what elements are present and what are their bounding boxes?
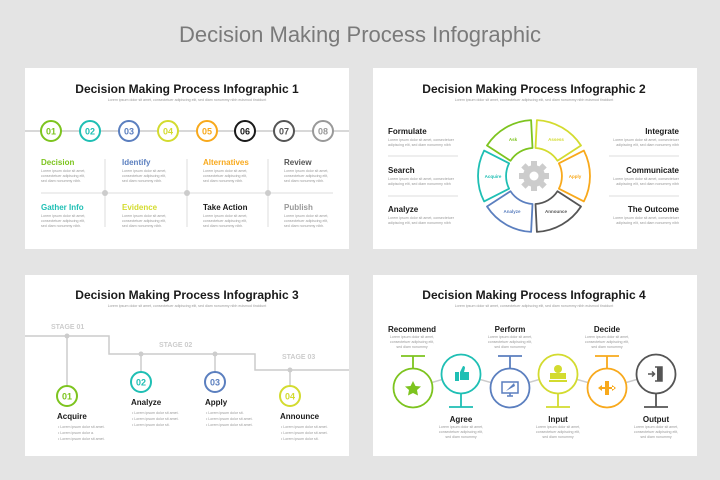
step labels: Input	[548, 415, 568, 424]
panel: infographic 1	[25, 68, 349, 249]
step labels: Decision	[41, 158, 74, 167]
panel: infographic 1: consectetuer adipiscing elit,	[203, 219, 247, 223]
step labels: Output	[643, 415, 669, 424]
panel: infographic 2: adipiscing elit, sed diam nonummy nibh	[388, 182, 451, 186]
panel: infographic 3: STAGE 03	[282, 354, 315, 361]
panel: infographic 2: Apply	[569, 174, 582, 179]
panel: infographic 3: • Lorem ipsum dolor a.	[58, 431, 94, 435]
panel: infographic 2: adipiscing elit, sed diam nonummy nibh	[388, 221, 451, 225]
panel: infographic 1: Lorem ipsum dolor sit amet,	[203, 214, 247, 218]
panel: infographic 1: sed diam nonummy nibh.	[284, 224, 324, 228]
T connectors	[401, 356, 668, 407]
panel: infographic 1: consectetuer adipiscing elit,	[122, 219, 166, 223]
panel: infographic 3: • Lorem ipsum dolor sit amet.	[206, 417, 253, 421]
panel: infographic 4: sed diam nonummy	[591, 345, 623, 349]
panel: infographic 3: Apply	[205, 398, 228, 407]
panel: infographic 3: Acquire	[57, 412, 87, 421]
panel: infographic 1: Lorem ipsum dolor sit amet,	[41, 169, 85, 173]
panel: infographic 4: sed diam nonummy	[542, 435, 574, 439]
left labels: Formulate	[388, 127, 427, 136]
panel: infographic 2: The Outcome	[628, 205, 680, 214]
panel: infographic 3: • Lorem ipsum dolor sit amet.	[132, 417, 179, 421]
panel: infographic 4: Lorem ipsum dolor sit amet,	[488, 335, 532, 339]
panel: infographic 4: consectetuer adipiscing elit,	[390, 340, 434, 344]
panel: infographic 1: 03	[124, 126, 134, 136]
heading 4: Decision Making Process Infographic 4	[422, 288, 646, 302]
panel: infographic 1: sed diam nonummy nibh.	[284, 179, 324, 183]
left labels: Search	[388, 166, 415, 175]
step labels: Recommend	[388, 325, 436, 334]
step labels: Evidence	[122, 203, 158, 212]
panel: infographic 2	[373, 68, 697, 249]
panel: infographic 2: Acquire	[485, 174, 502, 179]
panel: infographic 1: Lorem ipsum dolor sit amet,	[41, 214, 85, 218]
panel: infographic 4: Lorem ipsum dolor sit amet,	[536, 425, 580, 429]
panel: infographic 2: Lorem ipsum dolor sit amet, consectetuer	[613, 216, 680, 220]
icon: gear	[519, 161, 549, 191]
panel: infographic 2: Communicate	[626, 166, 680, 175]
panel: infographic 1: Lorem ipsum dolor sit amet,	[122, 214, 166, 218]
heading 1: Decision Making Process Infographic 1	[75, 82, 299, 96]
icon circles	[394, 354, 676, 408]
panel: infographic 1: 05	[202, 126, 212, 136]
panel: infographic 4: sed diam nonummy	[396, 345, 428, 349]
heading 2: Decision Making Process Infographic 2	[422, 82, 646, 96]
panel: infographic 1: consectetuer adipiscing elit,	[41, 219, 85, 223]
left labels: Analyze	[388, 205, 419, 214]
step labels: Gather Info	[41, 203, 84, 212]
panel: infographic 2: Lorem ipsum dolor sit amet, consectetuer	[388, 177, 455, 181]
panel: infographic 3: • Lorem ipsum dolor sit amet.	[206, 423, 253, 427]
heading 3: Decision Making Process Infographic 3	[75, 288, 299, 302]
panel: infographic 3: • Lorem ipsum dolor sit amet.	[58, 425, 105, 429]
panel: infographic 3: 02	[136, 378, 146, 388]
panel: infographic 4: consectetuer adipiscing elit,	[439, 430, 483, 434]
panel: infographic 4: Lorem ipsum dolor sit amet,	[634, 425, 678, 429]
panel: infographic 1: 08	[318, 126, 328, 136]
stage line	[25, 336, 349, 370]
panel: infographic 3: 04	[285, 392, 295, 402]
panel: infographic 3: Announce	[280, 412, 320, 421]
panel: infographic 3: 03	[210, 378, 220, 388]
panel: infographic 2: adipiscing elit, sed diam nonummy nibh	[616, 182, 679, 186]
icons	[405, 365, 662, 396]
panel: infographic 2: Assess	[548, 137, 564, 142]
panel: infographic 2: Lorem ipsum dolor sit amet, consectetuer	[613, 138, 680, 142]
panel: infographic 4: sed diam nonummy	[445, 435, 477, 439]
panel: infographic 2: Analyze	[503, 209, 521, 214]
step labels: Review	[284, 158, 312, 167]
panel: infographic 3: Analyze	[131, 398, 162, 407]
panel: infographic 1: Lorem ipsum dolor sit amet,	[203, 169, 247, 173]
step labels: Take Action	[203, 203, 248, 212]
panel: infographic 3: STAGE 01	[51, 324, 84, 331]
step labels	[41, 158, 313, 212]
panel: infographic 4: consectetuer adipiscing elit,	[634, 430, 678, 434]
panel: infographic 2: Announce	[545, 209, 567, 214]
panel: infographic 2: adipiscing elit, sed diam nonummy nibh	[616, 221, 679, 225]
panel: infographic 2: Lorem ipsum dolor sit amet, consectetuer adipiscing elit, sed diam nonummy nibh euismod tincidunt	[455, 98, 613, 102]
step labels	[388, 325, 669, 424]
panel: infographic 1: sed diam nonummy nibh.	[203, 179, 243, 183]
panel: infographic 1: Lorem ipsum dolor sit amet,	[284, 169, 328, 173]
panel: infographic 4: consectetuer adipiscing elit,	[585, 340, 629, 344]
panel: infographic 4: consectetuer adipiscing elit,	[536, 430, 580, 434]
step labels: Alternatives	[203, 158, 249, 167]
panel: infographic 2: Lorem ipsum dolor sit amet, consectetuer	[613, 177, 680, 181]
panel: infographic 1: 02	[85, 126, 95, 136]
panel: infographic 2: adipiscing elit, sed diam nonummy nibh	[388, 143, 451, 147]
panel: infographic 1: Lorem ipsum dolor sit amet,	[122, 169, 166, 173]
panel: infographic 3: • Lorem ipsum dolor sit amet.	[58, 437, 105, 441]
panel: infographic 1: sed diam nonummy nibh.	[41, 224, 81, 228]
panel: infographic 1: consectetuer adipiscing elit,	[284, 219, 328, 223]
panel: infographic 1: sed diam nonummy nibh.	[122, 224, 162, 228]
step labels: Perform	[495, 325, 525, 334]
panel: infographic 2: Integrate	[645, 127, 680, 136]
panel: infographic 1: 07	[279, 126, 289, 136]
panel: infographic 3: • Lorem ipsum dolor sit amet.	[132, 411, 179, 415]
panel: infographic 4	[373, 275, 697, 456]
panel: infographic 3: • Lorem ipsum dolor sit.	[206, 411, 244, 415]
panel: infographic 4: Lorem ipsum dolor sit amet,	[390, 335, 434, 339]
panel: infographic 1: Lorem ipsum dolor sit amet, consectetuer adipiscing elit, sed diam nonummy nibh euismod tincidunt	[108, 98, 266, 102]
panel: infographic 1: sed diam nonummy nibh.	[203, 224, 243, 228]
step circles	[41, 121, 333, 141]
step labels: Decide	[594, 325, 621, 334]
panel: infographic 4: Lorem ipsum dolor sit amet,	[439, 425, 483, 429]
panel: infographic 4: sed diam nonummy	[494, 345, 526, 349]
panel: infographic 4: sed diam nonummy	[640, 435, 672, 439]
panel: infographic 3: • Lorem ipsum dolor sit amet.	[281, 431, 328, 435]
panel: infographic 1: 04	[163, 126, 173, 136]
panel: infographic 3	[25, 275, 349, 456]
panel: infographic 3: 01	[62, 392, 72, 402]
step labels: Agree	[450, 415, 473, 424]
panel: infographic 2: adipiscing elit, sed diam nonummy nibh	[616, 143, 679, 147]
panel: infographic 3: • Lorem ipsum dolor sit.	[281, 437, 319, 441]
panel: infographic 4: consectetuer adipiscing elit,	[488, 340, 532, 344]
left labels	[388, 127, 427, 214]
panel: infographic 1: consectetuer adipiscing elit,	[122, 174, 166, 178]
panel: infographic 2: Ask	[509, 137, 518, 142]
panel: infographic 1: consectetuer adipiscing elit,	[41, 174, 85, 178]
panel: infographic 3: Lorem ipsum dolor sit amet, consectetuer adipiscing elit, sed diam nonummy nibh euismod tincidunt	[108, 304, 266, 308]
panel: infographic 4: Lorem ipsum dolor sit amet, consectetuer adipiscing elit, sed diam nonummy nibh euismod tincidunt	[455, 304, 613, 308]
panel: infographic 1: sed diam nonummy nibh.	[41, 179, 81, 183]
panel: infographic 1: consectetuer adipiscing elit,	[284, 174, 328, 178]
panel: infographic 3: • Lorem ipsum dolor sit.	[132, 423, 170, 427]
panel: infographic 4: Lorem ipsum dolor sit amet,	[585, 335, 629, 339]
main title: Decision Making Process Infographic	[179, 22, 541, 47]
step labels: Identify	[122, 158, 151, 167]
panel: infographic 2: Lorem ipsum dolor sit amet, consectetuer	[388, 138, 455, 142]
panel: infographic 1: 06	[240, 126, 250, 136]
panel: infographic 1: consectetuer adipiscing elit,	[203, 174, 247, 178]
panel: infographic 2: Lorem ipsum dolor sit amet, consectetuer	[388, 216, 455, 220]
panel: infographic 1: Lorem ipsum dolor sit amet,	[284, 214, 328, 218]
panel: infographic 3: STAGE 02	[159, 342, 192, 349]
panel: infographic 1: sed diam nonummy nibh.	[122, 179, 162, 183]
stage circles	[57, 372, 300, 406]
step labels: Publish	[284, 203, 313, 212]
ring segments	[478, 120, 590, 232]
panel: infographic 1: 01	[46, 126, 56, 136]
panel: infographic 3: • Lorem ipsum dolor sit amet.	[281, 425, 328, 429]
